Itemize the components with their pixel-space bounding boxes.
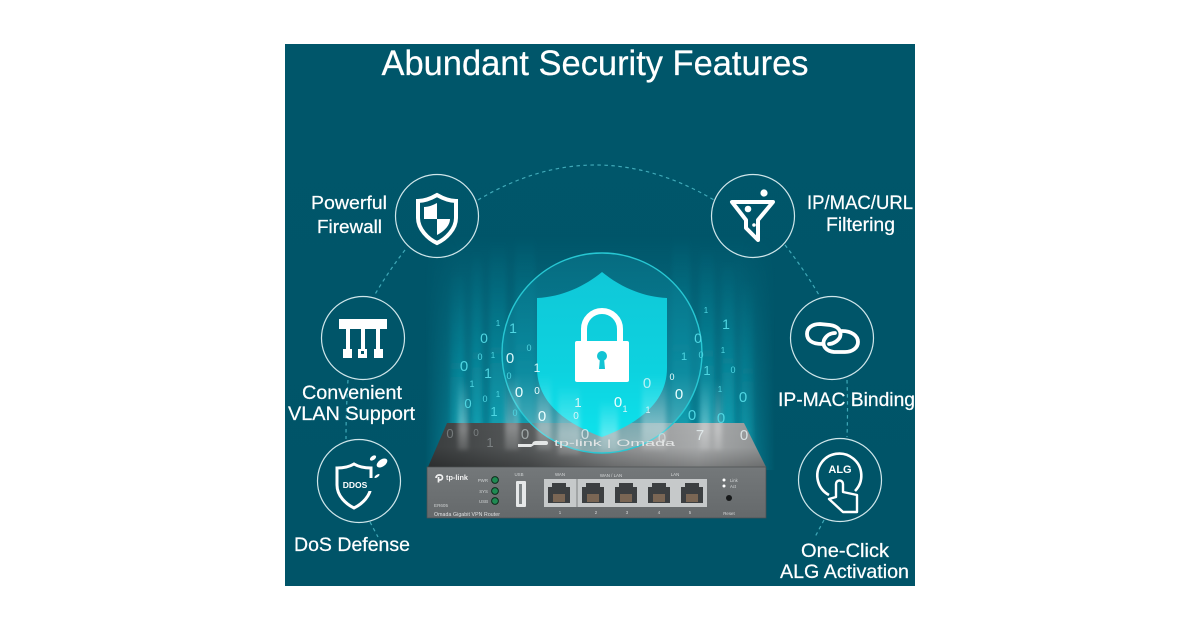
binary digits: 0: [688, 407, 696, 424]
digits reflected on router top: 0: [473, 428, 479, 439]
digits reflected on router top: 7: [696, 427, 704, 444]
binary digits: 0: [538, 408, 546, 425]
icon: DDOS shield: DDOS: [343, 480, 368, 490]
binary digits: 0: [573, 411, 579, 422]
binary digits: 0: [534, 386, 540, 397]
binary digits: 1: [704, 306, 709, 315]
VLAN label: Convenient: [302, 382, 403, 404]
binary digits: 0: [675, 386, 683, 403]
port labels: Reset: [723, 511, 736, 516]
shield: [537, 272, 667, 437]
binary digits: [460, 306, 747, 427]
link and reset indicators: Act: [730, 484, 737, 489]
binary digits: 0: [506, 350, 514, 367]
binary digits: 0: [480, 330, 488, 346]
USB port: USB: [514, 472, 524, 477]
binary digits: 0: [694, 330, 702, 346]
binary digits: 1: [484, 365, 492, 381]
binary digits: 1: [509, 320, 517, 336]
binary digits: 0: [512, 408, 518, 418]
binary digits: 1: [722, 316, 730, 332]
filtering label: IP/MAC/URL: [807, 192, 913, 214]
status LEDs: USB: [479, 499, 488, 504]
binary digits: 1: [645, 405, 651, 415]
digits reflected on router top: 1: [486, 435, 494, 450]
icon: ALG tap: [817, 454, 861, 512]
router top surface: [428, 423, 766, 467]
dashed connector arcs: [346, 165, 848, 537]
digits reflected on router top: 0: [658, 430, 666, 447]
port labels: 4: [658, 510, 661, 515]
USB port: [514, 472, 526, 507]
feature: IP/MAC/URL filtering: [712, 174, 913, 258]
port labels: 2: [595, 510, 598, 515]
binary digits: 0: [698, 350, 704, 360]
status LEDs: [478, 477, 498, 504]
digits reflected on router top: 0: [740, 427, 748, 444]
bubble circle: [502, 253, 702, 453]
central shield bubble: [502, 253, 702, 453]
digits reflected on router top: 0: [581, 426, 589, 443]
model labels: ER605: [434, 503, 448, 508]
light streaks behind shield: [430, 254, 770, 470]
binary digits: 1: [534, 361, 541, 375]
link and reset indicators: [722, 478, 739, 501]
title: Abundant Security Features: [382, 44, 808, 83]
link and reset indicators: Link: [730, 478, 739, 483]
firewall label: Powerful: [311, 192, 387, 213]
icon: ALG tap: ALG: [828, 464, 852, 476]
panel: teal background: [285, 44, 915, 586]
binary digits: 1: [496, 319, 501, 328]
binary digits: 0: [717, 410, 725, 427]
port labels: WAN / LAN: [600, 473, 622, 478]
binary digits: 1: [718, 385, 723, 394]
binary digits: 0: [464, 396, 472, 411]
binary digits: 0: [739, 389, 747, 406]
icon: funnel: [732, 189, 773, 240]
tp-link logo: tp-link: [446, 473, 469, 482]
binary digits: 1: [681, 351, 687, 363]
router top logo: [518, 438, 676, 449]
ALG label: ALG Activation: [780, 561, 909, 583]
binary digits: 0: [730, 365, 736, 375]
binary digits: 0: [477, 352, 483, 362]
port labels: WAN: [555, 472, 565, 477]
ALG circle: [798, 438, 882, 522]
digits reflected on router top: [446, 426, 748, 450]
binary digits: 1: [574, 395, 582, 410]
binary digits: 1: [490, 404, 498, 419]
icon: VLAN tree: [339, 319, 387, 358]
router: [427, 426, 766, 518]
ALG label: [780, 540, 909, 583]
binary digits: 1: [469, 379, 475, 389]
binary digits: 0: [506, 371, 512, 381]
binding circle: [790, 296, 874, 380]
binding label: IP-MAC Binding: [778, 389, 915, 411]
port labels: LAN: [671, 472, 679, 477]
icon: shield: [418, 195, 456, 243]
filtering label: Filtering: [826, 215, 895, 236]
digits reflected on router top: 0: [446, 426, 454, 441]
infographic canvas: [285, 44, 915, 586]
VLAN label: VLAN Support: [288, 403, 416, 425]
digits reflected on router top: 0: [521, 426, 529, 443]
filtering label: [807, 192, 913, 236]
DoS label: DoS Defense: [294, 534, 410, 556]
feature: powerful firewall: [311, 174, 478, 258]
binary digits: 0: [460, 358, 468, 375]
binary digits: 1: [496, 390, 501, 399]
DoS circle: [318, 440, 400, 522]
logo mark: [436, 475, 442, 482]
status LEDs: SYS: [479, 489, 488, 494]
router top logo: tp-link | Omada: [554, 438, 676, 449]
port labels: 5: [689, 510, 692, 515]
binary digits: 1: [491, 351, 496, 360]
icon: chain link: [807, 324, 858, 352]
firewall label: [311, 192, 387, 237]
filter circle: [712, 174, 794, 258]
feature: VLAN support: [288, 296, 416, 425]
binary digits: 1: [721, 346, 726, 355]
firewall label: Firewall: [317, 216, 382, 237]
ethernet ports: [544, 479, 707, 507]
binary digits: 0: [482, 394, 488, 404]
port labels: 3: [626, 510, 629, 515]
VLAN circle: [322, 296, 404, 380]
port labels: [555, 472, 736, 516]
white light streaks: [458, 375, 722, 455]
binary digits: 1: [703, 363, 711, 378]
binary digits: 0: [643, 375, 651, 392]
binary digits: 0: [526, 343, 532, 353]
VLAN label: [288, 382, 416, 425]
ALG label: One-Click: [801, 540, 889, 562]
firewall circle: [396, 174, 478, 258]
model description: Omada Gigabit VPN Router: [434, 512, 500, 518]
router front panel: [427, 467, 766, 518]
feature: IP-MAC binding: [778, 296, 915, 411]
binary digits: 0: [515, 384, 523, 401]
port labels: 1: [559, 510, 562, 515]
binary digits: 0: [669, 372, 675, 382]
feature: one-click ALG activation: [780, 438, 909, 583]
status LEDs: PWR: [478, 478, 488, 483]
icon: padlock: [575, 311, 629, 382]
binary digits: 0: [614, 394, 622, 411]
binary digits: 1: [622, 404, 628, 414]
feature: DoS defense: [294, 440, 410, 556]
